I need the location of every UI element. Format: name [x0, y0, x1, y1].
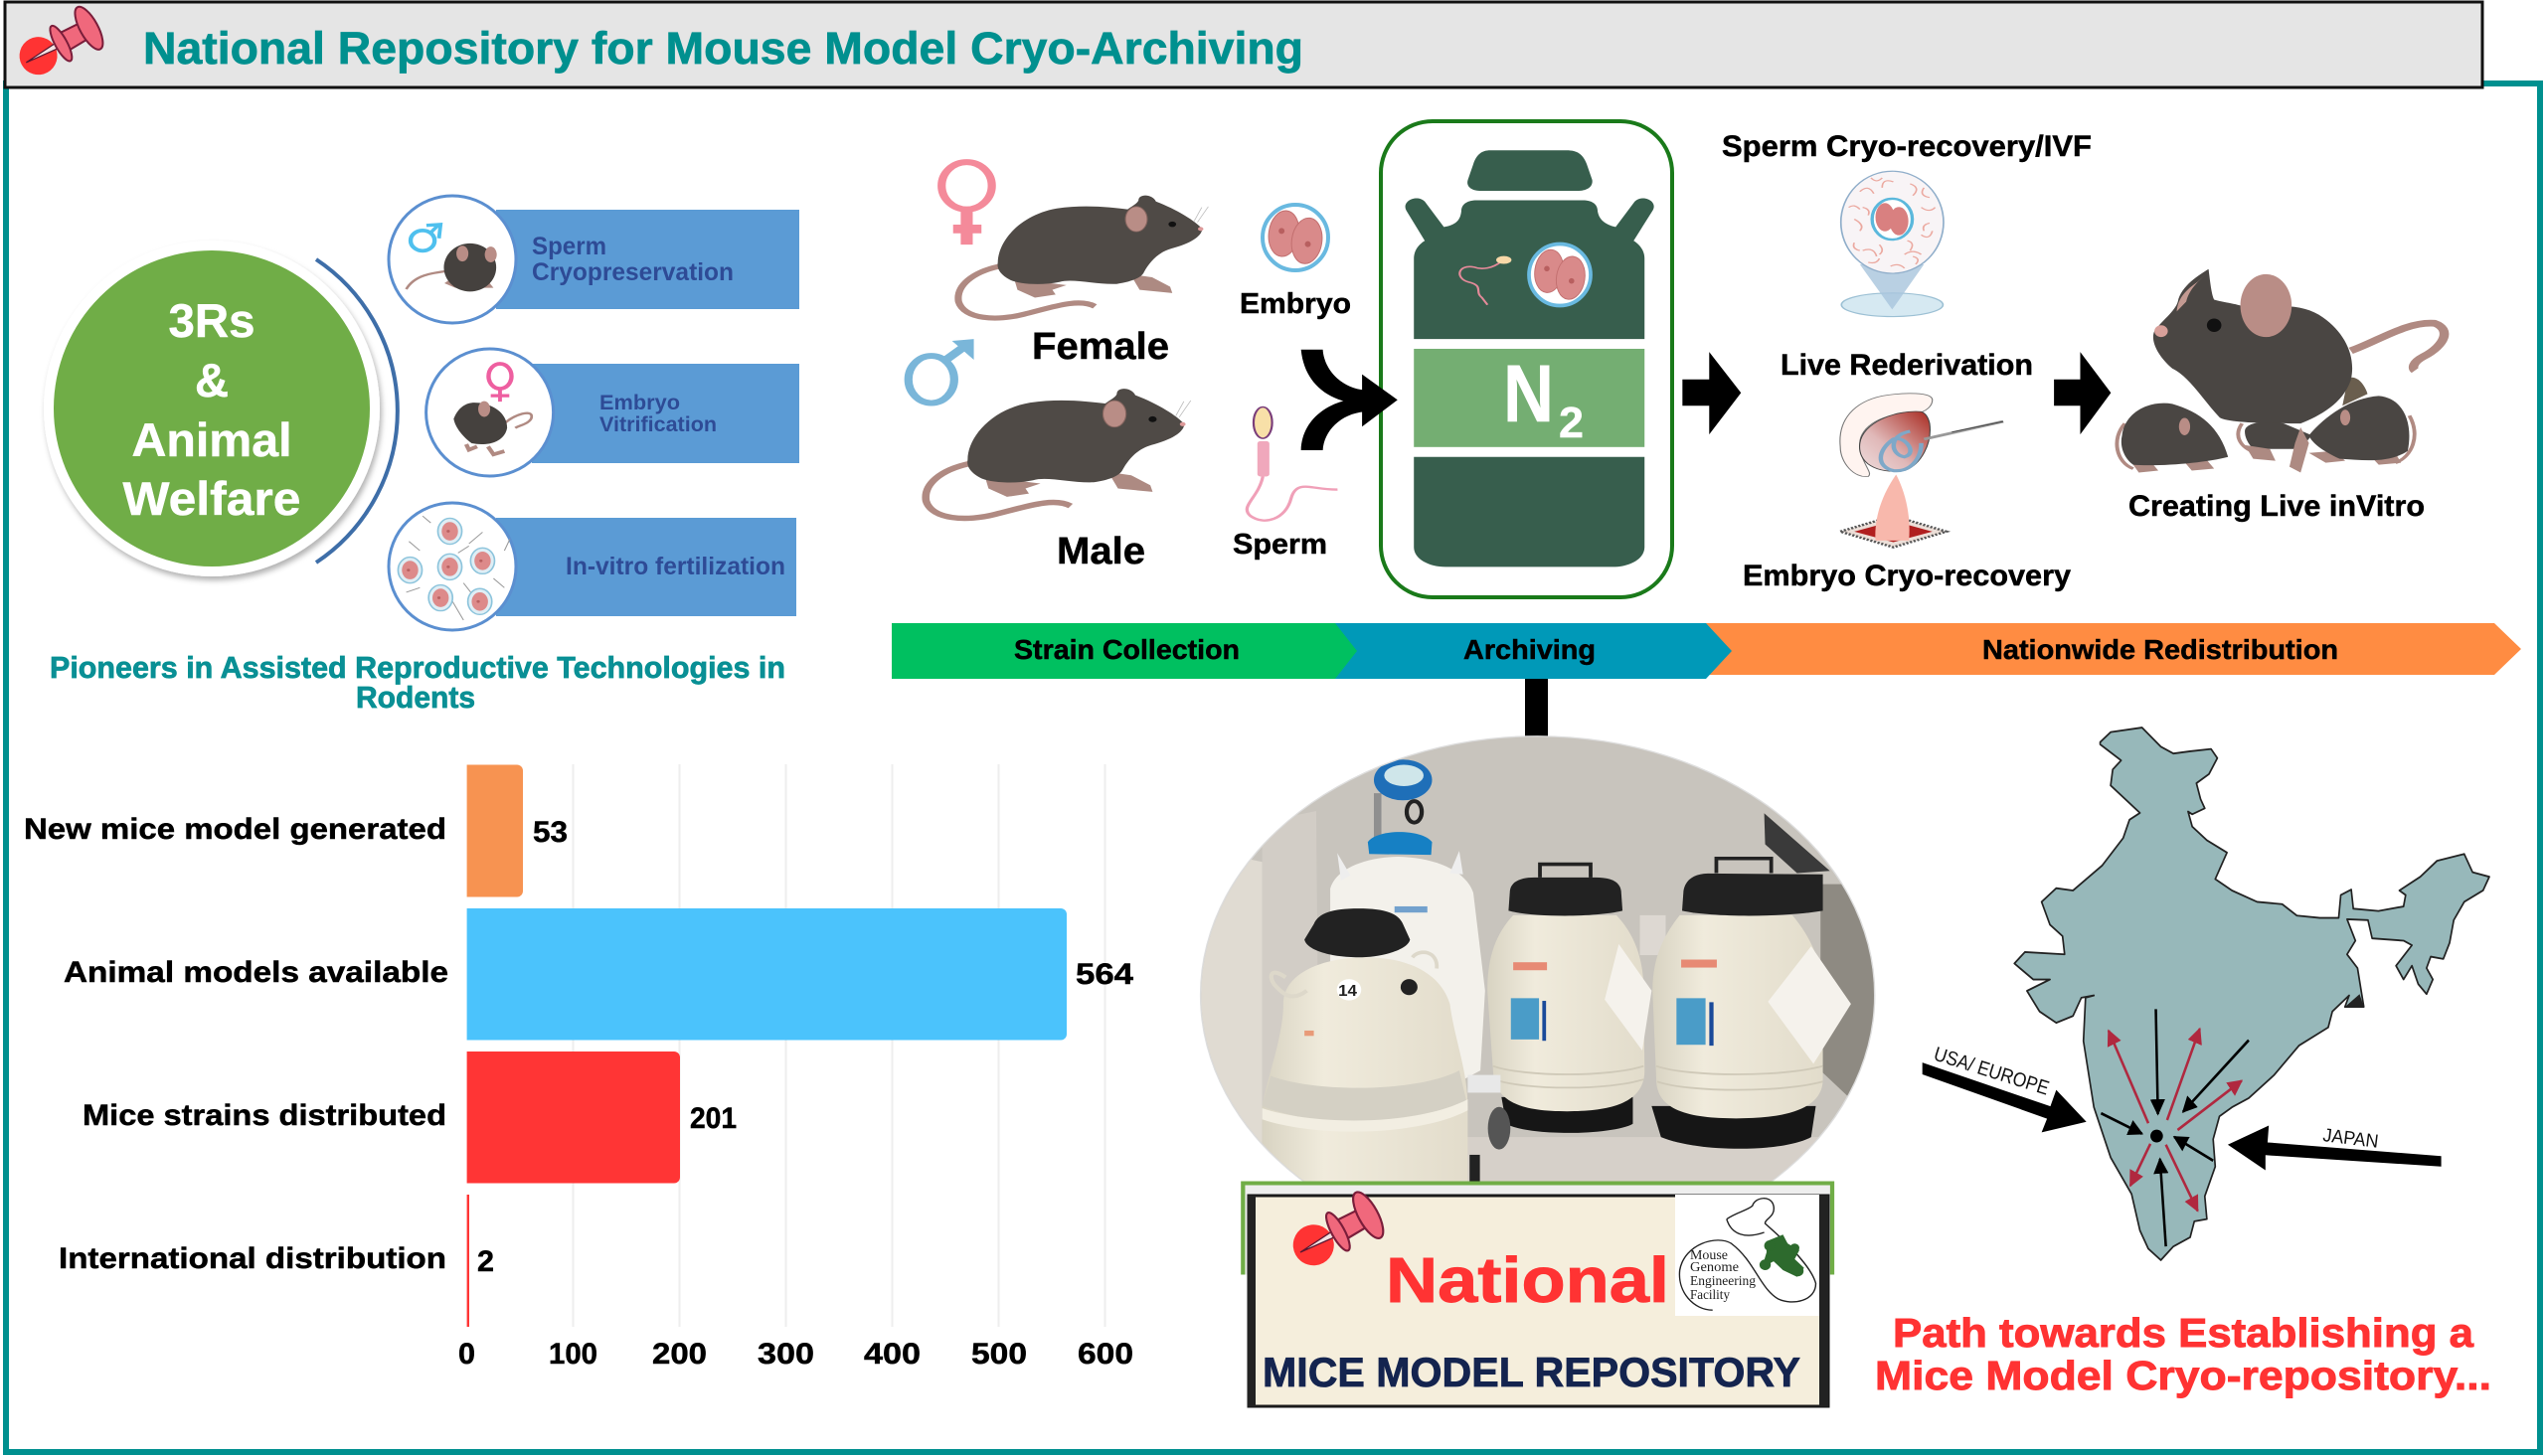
icon: mother mouse with pups — [2117, 269, 2445, 473]
panel: India map — [1875, 728, 2491, 1398]
central 3Rs circle: 3Rs — [169, 294, 254, 347]
icon: fertilised eggs — [398, 516, 510, 620]
label: female: Female — [1032, 326, 1169, 368]
caption: path towards repository: Path towards Establishing a — [1893, 1310, 2474, 1356]
label: national: National — [1386, 1244, 1669, 1316]
arrows: inbound — [2101, 1009, 2249, 1246]
green frame — [1243, 1184, 1832, 1274]
logo: mouse genome engineering facility: Facility — [1690, 1288, 1730, 1303]
icon: female symbol — [941, 162, 992, 244]
front left dewar — [1263, 957, 1467, 1186]
title: National Repository for Mouse Model Cryo-Archiving — [143, 23, 1303, 74]
item: embryo vitrification: Embryo — [599, 392, 680, 414]
item: sperm cryopreservation — [389, 196, 799, 323]
icon: male mouse front — [407, 225, 497, 291]
arrow: dewar to rederivation — [1682, 352, 1741, 434]
icon: embryo — [1263, 205, 1328, 270]
x axis labels: 600 — [1078, 1338, 1133, 1371]
label: N2 — [1503, 349, 1584, 447]
bar: animal models available: 564 — [1076, 958, 1133, 991]
logo: mouse genome engineering facility — [1675, 1195, 1819, 1316]
item: in-vitro fertilization: In-vitro fertilization — [566, 553, 785, 580]
x axis labels: 300 — [758, 1338, 814, 1371]
map of India — [2014, 728, 2489, 1260]
icons: female and male mice — [909, 162, 1208, 518]
label: live rederivation: Live Rederivation — [1781, 349, 2033, 382]
photo: cryo storage dewars: 14 — [1338, 982, 1358, 1000]
bar: new mice model generated — [24, 765, 568, 896]
bar: new mice model generated: 53 — [533, 816, 568, 849]
middle dewar — [1501, 1097, 1632, 1133]
stage ribbon: Nationwide Redistribution — [1982, 634, 2338, 665]
dewar illustration — [1406, 150, 1654, 566]
label: mice model repository: MICE MODEL REPOSITORY — [1263, 1349, 1800, 1395]
x axis labels: 0 — [458, 1338, 475, 1371]
icon: female mouse — [958, 196, 1208, 318]
bar: mice strains distributed: Mice strains distributed — [83, 1099, 446, 1132]
right dewar — [1651, 1106, 1816, 1149]
x axis labels: 500 — [971, 1338, 1027, 1371]
caption: path towards repository: Mice Model Cryo-repository... — [1875, 1353, 2491, 1398]
central 3Rs circle: Welfare — [123, 472, 300, 525]
x axis labels — [458, 1338, 1133, 1371]
bar: animal models available — [64, 908, 1133, 1040]
panel: liquid nitrogen dewar — [1381, 121, 1672, 597]
caption: path towards repository — [1875, 1310, 2491, 1398]
stage: nationwide redistribution — [1706, 623, 2521, 675]
x axis labels: 100 — [549, 1338, 597, 1371]
panel: strain collection and archiving diagram — [892, 121, 2521, 736]
item: sperm cryopreservation: Cryopreservation — [532, 258, 734, 286]
bar: international distribution: International distribution — [59, 1242, 446, 1275]
label: Japan: JAPAN — [2321, 1125, 2380, 1153]
label: creating live in vitro: Creating Live inVitro — [2128, 490, 2425, 523]
central 3Rs circle — [44, 241, 380, 576]
panel: 3Rs and animal welfare — [44, 196, 799, 715]
arrow: Japan — [2228, 1125, 2442, 1170]
bar: international distribution: 2 — [477, 1245, 494, 1278]
logo: mouse genome engineering facility: Engineering — [1690, 1274, 1756, 1289]
icon: male mouse — [926, 389, 1191, 518]
icon: IVF dish — [1841, 171, 1944, 317]
stage ribbon — [892, 623, 2521, 679]
item: sperm cryopreservation: Sperm — [532, 233, 606, 260]
icon: embryo in dewar — [1529, 244, 1591, 306]
item: embryo vitrification — [426, 349, 799, 476]
stage ribbon: Strain Collection — [1014, 634, 1240, 665]
icon: sperm — [1247, 406, 1337, 521]
connector: ribbon to photo — [1525, 679, 1548, 736]
item: in-vitro fertilization — [389, 503, 796, 630]
wheels and small parts — [1467, 1075, 1500, 1092]
icon: push pin — [10, 3, 108, 85]
x axis labels: 400 — [864, 1338, 921, 1371]
logo: mouse genome engineering facility: Genome — [1690, 1260, 1739, 1275]
caption: pioneers — [50, 650, 785, 715]
title bar — [5, 2, 2482, 87]
distribution hub — [2150, 1130, 2163, 1142]
bar: animal models available: Animal models available — [64, 956, 448, 989]
label: embryo cryo-recovery: Embryo Cryo-recovery — [1743, 560, 2071, 592]
label: USA / Europe: USA/ EUROPE — [1932, 1044, 2052, 1100]
bar chart — [24, 764, 1133, 1371]
item: embryo vitrification: Vitrification — [599, 413, 717, 436]
photo: cryo storage dewars — [1200, 735, 1875, 1181]
gridlines — [573, 764, 1105, 1327]
icon: male symbol — [909, 339, 974, 404]
label: male: Male — [1057, 531, 1145, 572]
caption: pioneers: Rodents — [356, 680, 475, 715]
arrow: merge into dewar — [1301, 350, 1398, 450]
icon: embryo transfer surgery — [1840, 394, 2003, 548]
panel: national mice model repository banner — [1243, 1184, 1832, 1406]
label: N2: 2 — [1559, 399, 1584, 447]
arrow: rederivation to live mice — [2054, 352, 2111, 434]
label: N2: N — [1503, 349, 1554, 439]
label: sperm: Sperm — [1233, 529, 1327, 561]
icon: push pin — [1283, 1188, 1389, 1277]
bar: new mice model generated: New mice model generated — [24, 813, 446, 846]
icon: female mouse — [453, 364, 532, 454]
logo: mouse genome engineering facility: Mouse — [1690, 1248, 1728, 1263]
central 3Rs circle: Animal — [131, 413, 292, 466]
bar: mice strains distributed: 201 — [690, 1102, 737, 1135]
x axis labels: 200 — [652, 1338, 707, 1371]
label: embryo: Embryo — [1240, 288, 1351, 320]
central 3Rs circle: & — [195, 354, 229, 406]
label: sperm cryo-recovery: Sperm Cryo-recovery/IVF — [1722, 130, 2092, 163]
bar: international distribution — [59, 1195, 494, 1327]
stage: strain collection — [892, 623, 1357, 679]
back dewar — [1374, 793, 1382, 837]
stage ribbon: Archiving — [1463, 634, 1596, 665]
arrow: USA / Europe — [1923, 1062, 2087, 1132]
banner background — [1249, 1196, 1828, 1406]
caption: pioneers: Pioneers in Assisted Reproductive Technologies in — [50, 650, 785, 685]
arrows: outbound — [2109, 1029, 2242, 1211]
blue arc — [316, 259, 398, 563]
stage: archiving — [1332, 623, 1732, 679]
bar: mice strains distributed — [83, 1052, 737, 1183]
